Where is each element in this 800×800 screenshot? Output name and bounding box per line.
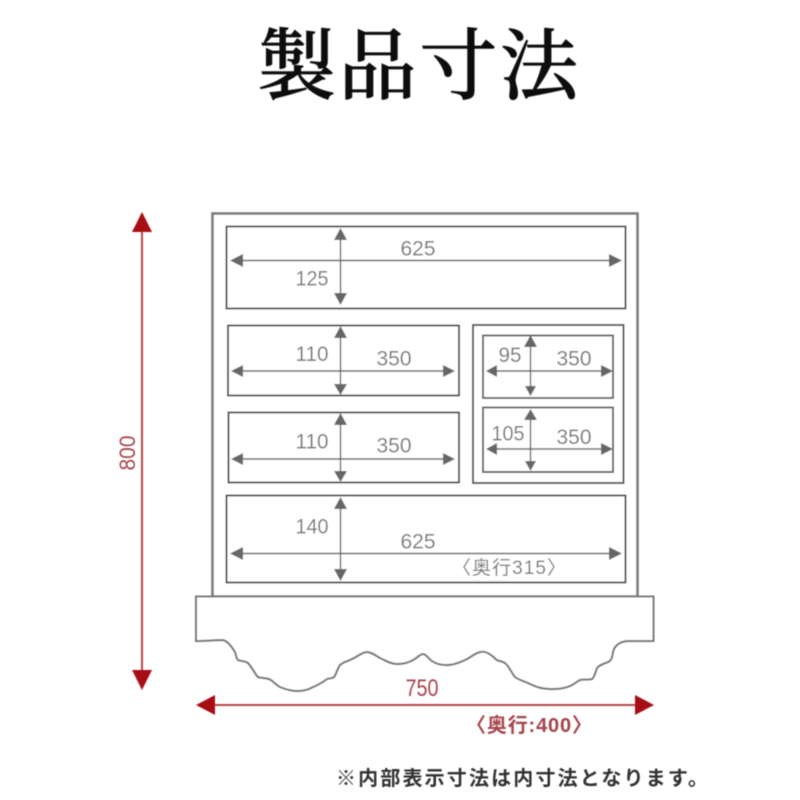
label: 95: 95: [498, 343, 522, 367]
dimension arrow: top drawer width: [230, 254, 622, 267]
footnote: ※内部表示寸法は内寸法となります。: [336, 767, 708, 790]
label: 350: 350: [556, 425, 592, 449]
dimension arrow: width 350: [231, 365, 455, 377]
bottom drawer: [226, 496, 626, 582]
label: 350: 350: [556, 346, 592, 370]
lower left drawer: [228, 412, 459, 482]
scalloped base: [196, 596, 654, 691]
label: 125: 125: [296, 266, 329, 290]
label: 350: 350: [376, 346, 412, 370]
label: 625: 625: [400, 236, 436, 260]
label: 105: 105: [492, 422, 525, 446]
dimension arrow: width 350: [231, 453, 455, 465]
label: 625: 625: [400, 530, 436, 554]
dimension arrow: height 110: [334, 413, 347, 482]
label: 800: 800: [115, 436, 140, 470]
right upper drawer: [483, 335, 613, 398]
red width arrow: [196, 675, 654, 737]
dimension arrow: width 350: [486, 443, 613, 455]
dimension arrow: height 105: [524, 409, 537, 471]
dimension arrow: width 350: [486, 365, 613, 377]
upper left drawer: [228, 326, 459, 396]
cabinet body: [212, 214, 638, 596]
dimension arrow: bottom drawer height: [334, 497, 347, 581]
dimension arrow: height 95: [524, 335, 537, 396]
label: depth 315: 〈奥行315〉: [452, 557, 566, 579]
label: 350: 350: [376, 434, 412, 458]
label: 140: 140: [296, 514, 329, 538]
right drawer frame: [473, 325, 624, 483]
red height arrow: [115, 212, 152, 690]
dimension arrow: bottom drawer width: [230, 547, 622, 560]
title: 製品寸法: [258, 23, 581, 110]
dimension arrow: height 110: [334, 326, 347, 395]
label: depth 400: 〈奥行:400〉: [466, 714, 592, 737]
top drawer: [226, 226, 626, 308]
label: 110: 110: [296, 342, 329, 366]
dimension arrow: top drawer height: [334, 228, 347, 305]
right lower drawer: [483, 408, 613, 472]
label: 110: 110: [296, 430, 329, 454]
label: 750: 750: [406, 675, 438, 702]
